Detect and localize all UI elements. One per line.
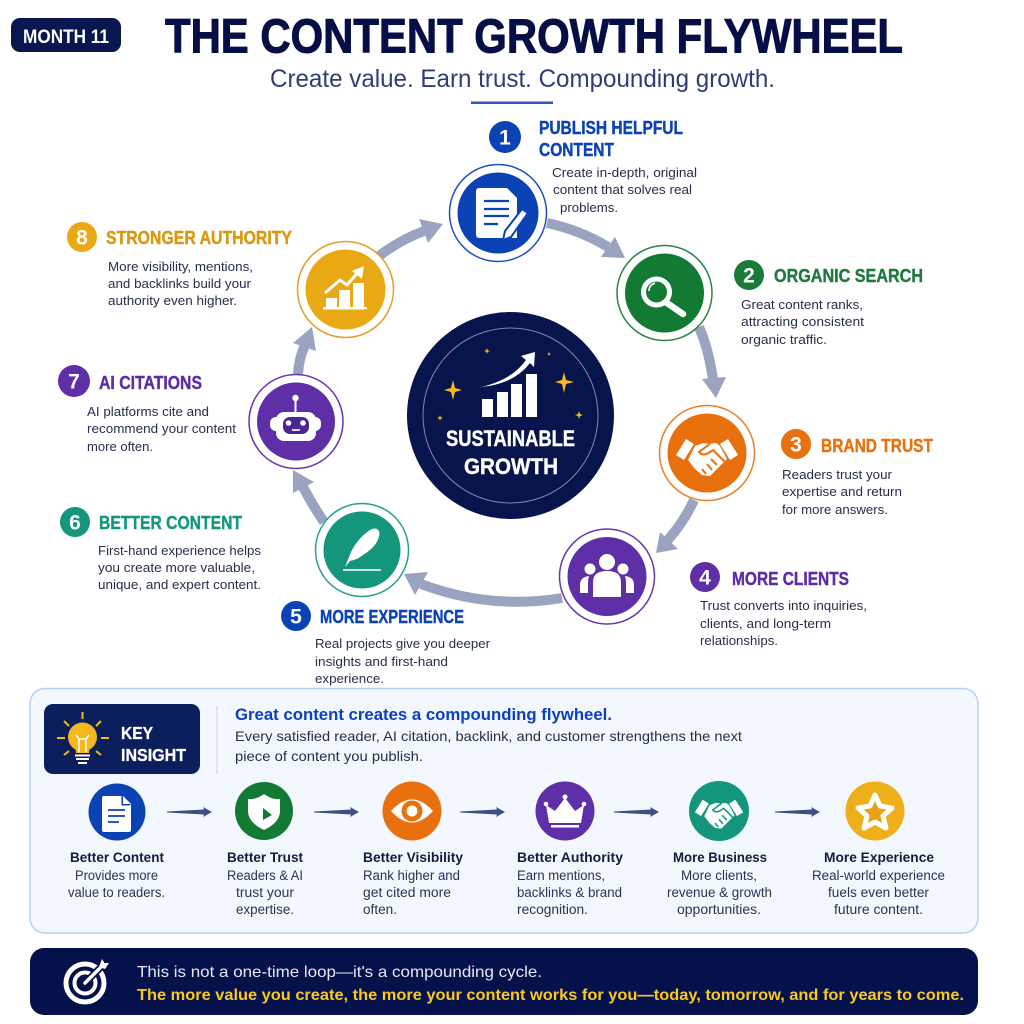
item: better visibility: Better Visibility <box>363 849 463 865</box>
step 7 text: AI CITATIONS <box>99 373 202 393</box>
title: THE CONTENT GROWTH FLYWHEEL <box>165 10 903 64</box>
step 1 text: PUBLISH HELPFUL <box>539 118 683 138</box>
item: better content: value to readers. <box>68 885 165 900</box>
item: better trust: Better Trust <box>227 849 303 865</box>
step 2 text: ORGANIC SEARCH <box>774 266 923 286</box>
step 1 text <box>489 118 697 215</box>
node 4: clients icon <box>560 529 654 624</box>
item: better authority: Better Authority <box>517 849 623 865</box>
banner text: This is not a one-time loop—it's a compounding cycle. <box>137 964 542 981</box>
item: more business <box>667 781 772 917</box>
step 4 text <box>690 562 867 648</box>
flywheel arrows <box>293 219 726 602</box>
step 4 text: MORE CLIENTS <box>732 569 849 589</box>
item: better content: Provides more <box>75 868 158 883</box>
step 1 text: 1 <box>499 126 511 150</box>
step 2 text: organic traffic. <box>741 332 827 347</box>
key insight badge <box>44 704 200 774</box>
insight description: piece of content you publish. <box>235 748 423 764</box>
arrow <box>775 807 820 817</box>
step 6 text: 6 <box>69 512 81 534</box>
step 4 text: clients, and long-term <box>700 616 831 631</box>
badge: month 11: MONTH 11 <box>23 27 109 48</box>
step 6 text: you create more valuable, <box>98 560 255 575</box>
icon: target <box>66 959 109 1002</box>
item: better trust <box>227 782 303 917</box>
step 1 text: Create in-depth, original <box>552 165 697 180</box>
arrow <box>167 807 212 817</box>
item: better content: Better Content <box>70 849 164 865</box>
step 5 text <box>281 601 491 686</box>
arrow <box>460 807 505 817</box>
node 3: handshake icon <box>660 406 754 500</box>
step 3 text: expertise and return <box>782 484 902 499</box>
item: more business: More Business <box>673 849 767 865</box>
item: more experience: fuels even better <box>828 885 929 900</box>
banner highlight: The more value you create, the more your content works for you—today, tomorrow, and for years to come. <box>137 987 964 1004</box>
step 7 text: AI platforms cite and <box>87 404 209 419</box>
bottom banner <box>30 948 978 1015</box>
step 5 text: MORE EXPERIENCE <box>320 607 464 627</box>
node 2: search icon <box>617 246 712 340</box>
step 8 text: STRONGER AUTHORITY <box>106 228 292 248</box>
item: better authority <box>517 782 623 917</box>
step 6 text: First-hand experience helps <box>98 543 262 558</box>
item: more business: revenue & growth <box>667 885 772 900</box>
item: better authority: backlinks & brand <box>517 885 622 900</box>
badge: month 11 <box>11 18 121 52</box>
step 3 text: for more answers. <box>782 502 888 517</box>
step 1 text: CONTENT <box>539 140 614 160</box>
center hub: sustainable growth: SUSTAINABLE <box>446 426 575 451</box>
item: better visibility: Rank higher and <box>363 868 460 883</box>
item: better visibility <box>363 782 463 917</box>
step 3 text: BRAND TRUST <box>821 436 933 456</box>
step 2 text: Great content ranks, <box>741 297 863 312</box>
center hub: sustainable growth: GROWTH <box>464 454 558 479</box>
item: better content <box>68 784 165 900</box>
step 5 text: insights and first-hand <box>315 654 448 669</box>
item: more experience: More Experience <box>824 849 934 865</box>
item: more experience <box>812 782 945 917</box>
step 5 text: 5 <box>290 606 302 628</box>
item: more business: More clients, <box>681 868 757 883</box>
step 6 text: unique, and expert content. <box>98 577 261 592</box>
step 6 text <box>60 507 262 592</box>
step 2 text <box>734 260 923 347</box>
node 8: authority growth icon <box>298 242 394 338</box>
step 8 text: More visibility, mentions, <box>108 259 253 274</box>
step 1 text: problems. <box>560 200 618 215</box>
key insight badge: KEY <box>121 723 153 743</box>
arrow <box>314 807 359 817</box>
panel: key insight <box>30 688 978 933</box>
step 5 text: experience. <box>315 671 384 686</box>
item: better visibility: often. <box>363 902 397 917</box>
item: better trust: trust your <box>236 885 295 900</box>
step 2 text: attracting consistent <box>741 314 864 329</box>
insight headline: Great content creates a compounding flywheel. <box>235 705 612 724</box>
arrow <box>614 807 659 817</box>
step 7 text: more often. <box>87 439 153 454</box>
step 8 text: authority even higher. <box>108 293 237 308</box>
item: better visibility: get cited more <box>363 885 451 900</box>
key insight badge: INSIGHT <box>121 745 186 765</box>
step 1 text: content that solves real <box>553 182 692 197</box>
step 3 text: 3 <box>790 434 802 456</box>
step 7 text <box>58 365 236 454</box>
item: better authority: recognition. <box>517 902 588 917</box>
step 4 text: 4 <box>699 566 711 590</box>
step 7 text: 7 <box>68 370 80 394</box>
node 5: experience icon <box>316 504 408 596</box>
insight description: Every satisfied reader, AI citation, backlink, and customer strengthens the next <box>235 728 742 744</box>
step 6 text: BETTER CONTENT <box>99 513 242 533</box>
insight description <box>235 728 742 764</box>
item: more experience: Real-world experience <box>812 868 945 883</box>
step 8 text <box>67 222 292 308</box>
item: better trust: expertise. <box>236 902 294 917</box>
item: more experience: future content. <box>834 902 923 917</box>
step 5 text: Real projects give you deeper <box>315 636 491 651</box>
step 3 text <box>781 429 933 517</box>
step 4 text: relationships. <box>700 633 778 648</box>
step 8 text: 8 <box>76 226 88 250</box>
item: more business: opportunities. <box>677 902 761 917</box>
node 1: publish icon <box>450 164 546 262</box>
step 4 text: Trust converts into inquiries, <box>700 598 867 613</box>
subtitle: Create value. Earn trust. Compounding growth. <box>270 65 775 93</box>
node 7: AI robot icon <box>249 374 343 468</box>
step 3 text: Readers trust your <box>782 467 893 482</box>
center hub: sustainable growth <box>407 312 614 519</box>
step 8 text: and backlinks build your <box>108 276 252 291</box>
item: better trust: Readers & AI <box>227 868 303 883</box>
step 2 text: 2 <box>743 264 755 288</box>
step 7 text: recommend your content <box>87 421 236 436</box>
item: better authority: Earn mentions, <box>517 868 605 883</box>
